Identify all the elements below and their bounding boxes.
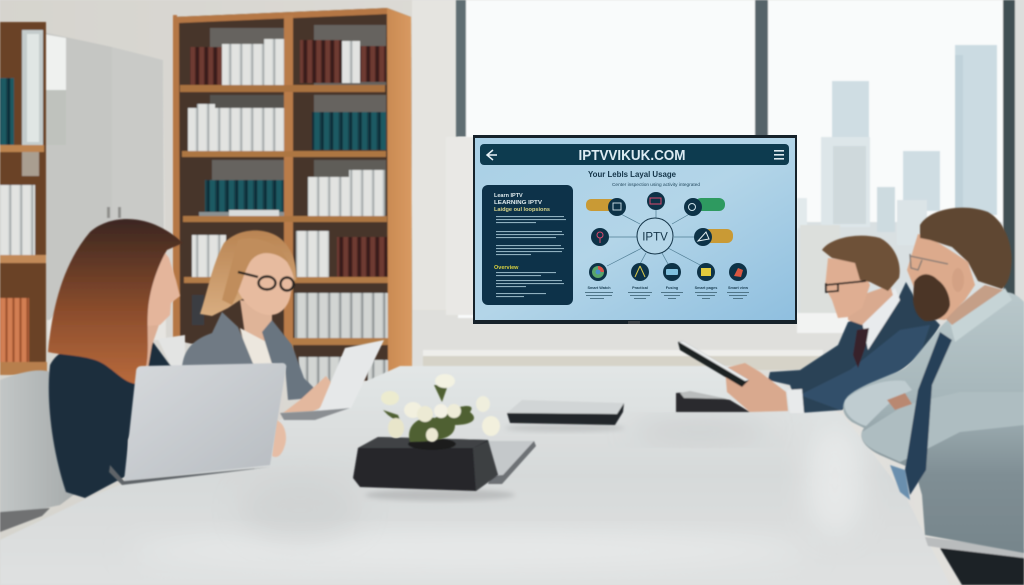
flower arrangement <box>381 374 500 442</box>
screen header bar <box>480 144 789 165</box>
glasses <box>826 281 866 292</box>
neck <box>240 300 272 345</box>
panel: screen left text panel: Laidge oul loopsions <box>494 207 550 213</box>
left storage cabinet <box>42 15 177 340</box>
diagram bottom captions: Smart pages <box>695 286 717 290</box>
cuff <box>787 389 804 413</box>
neck <box>945 285 1003 325</box>
screen subheading: Center inspection using activity integrated <box>612 182 700 187</box>
ear <box>952 268 964 292</box>
books: row 6 <box>299 357 390 387</box>
conference table <box>0 366 950 585</box>
panel: wall panel behind screen <box>423 137 823 370</box>
diagram icons <box>589 192 747 281</box>
diagram center IPTV circle: IPTV <box>642 232 668 244</box>
chair: right arm <box>925 537 1024 585</box>
suit <box>768 282 940 413</box>
chair: back <box>158 335 185 368</box>
folder <box>676 392 750 412</box>
tie <box>905 332 952 495</box>
hair <box>822 236 900 291</box>
window with city skyline <box>456 0 1024 333</box>
panel: screen left text panel: LEARNING IPTV <box>494 200 542 206</box>
face <box>138 250 180 326</box>
screen heading: Your Lebls Layal Usage <box>588 169 676 179</box>
screen header bar: IPTVVIKUK.COM <box>578 148 686 164</box>
conference device behind base <box>485 441 536 484</box>
person: woman with auburn hair <box>48 219 286 498</box>
person: woman in grey blazer <box>182 230 336 413</box>
books: row 3 <box>199 170 385 216</box>
face <box>907 234 975 320</box>
shirt body <box>843 292 1024 553</box>
hair <box>48 219 183 384</box>
diagram bottom captions: Smart Watch <box>587 286 611 290</box>
diagram pills <box>586 198 733 243</box>
shirt <box>240 328 280 368</box>
face <box>236 253 294 315</box>
lower sleeve <box>862 392 1024 462</box>
wrist <box>887 393 912 410</box>
laptop: back <box>280 340 384 420</box>
laptop: front <box>109 363 286 485</box>
bookshelf <box>174 8 412 387</box>
person: man in light shirt <box>843 208 1024 553</box>
shirt collar <box>862 288 900 350</box>
panel: screen left text panel <box>482 185 573 305</box>
blazer <box>182 312 254 367</box>
diagram connector lines <box>607 208 702 266</box>
diagram bottom captions: Smart view <box>728 286 748 290</box>
books: row 5 <box>192 293 388 339</box>
books: row 4 <box>192 231 388 277</box>
jacket <box>49 338 172 498</box>
arm <box>283 376 336 413</box>
folded forearm <box>844 380 912 426</box>
chair: left <box>0 370 80 532</box>
hand <box>272 420 286 457</box>
books: row 1 <box>190 39 386 85</box>
hair <box>920 208 1012 289</box>
diagram center IPTV circle <box>637 218 673 254</box>
wall display screen <box>473 135 797 324</box>
closed tablet on table <box>507 400 624 425</box>
beard <box>913 274 950 321</box>
frame <box>174 8 387 340</box>
books: row 2 <box>188 104 386 151</box>
diagram bottom captions: Fusing <box>666 286 679 290</box>
panel: screen left text panel: Overview <box>494 265 519 271</box>
diagram bottom captions: Practical <box>632 286 648 290</box>
jeans hint <box>890 465 910 500</box>
left wooden shelf with books <box>0 22 47 375</box>
hair back <box>200 230 296 316</box>
neck <box>848 285 893 325</box>
neck <box>132 310 160 368</box>
centerpiece base <box>353 437 498 491</box>
panel: screen left text panel: Learn IPTV <box>494 193 523 199</box>
tablet <box>678 341 749 387</box>
person: man in navy suit <box>676 236 940 413</box>
hands <box>725 363 788 412</box>
face <box>825 258 870 318</box>
collar <box>950 288 1012 342</box>
tie <box>853 328 869 368</box>
diagram bottom captions <box>587 286 748 290</box>
glasses <box>910 254 948 270</box>
glasses <box>238 272 294 290</box>
